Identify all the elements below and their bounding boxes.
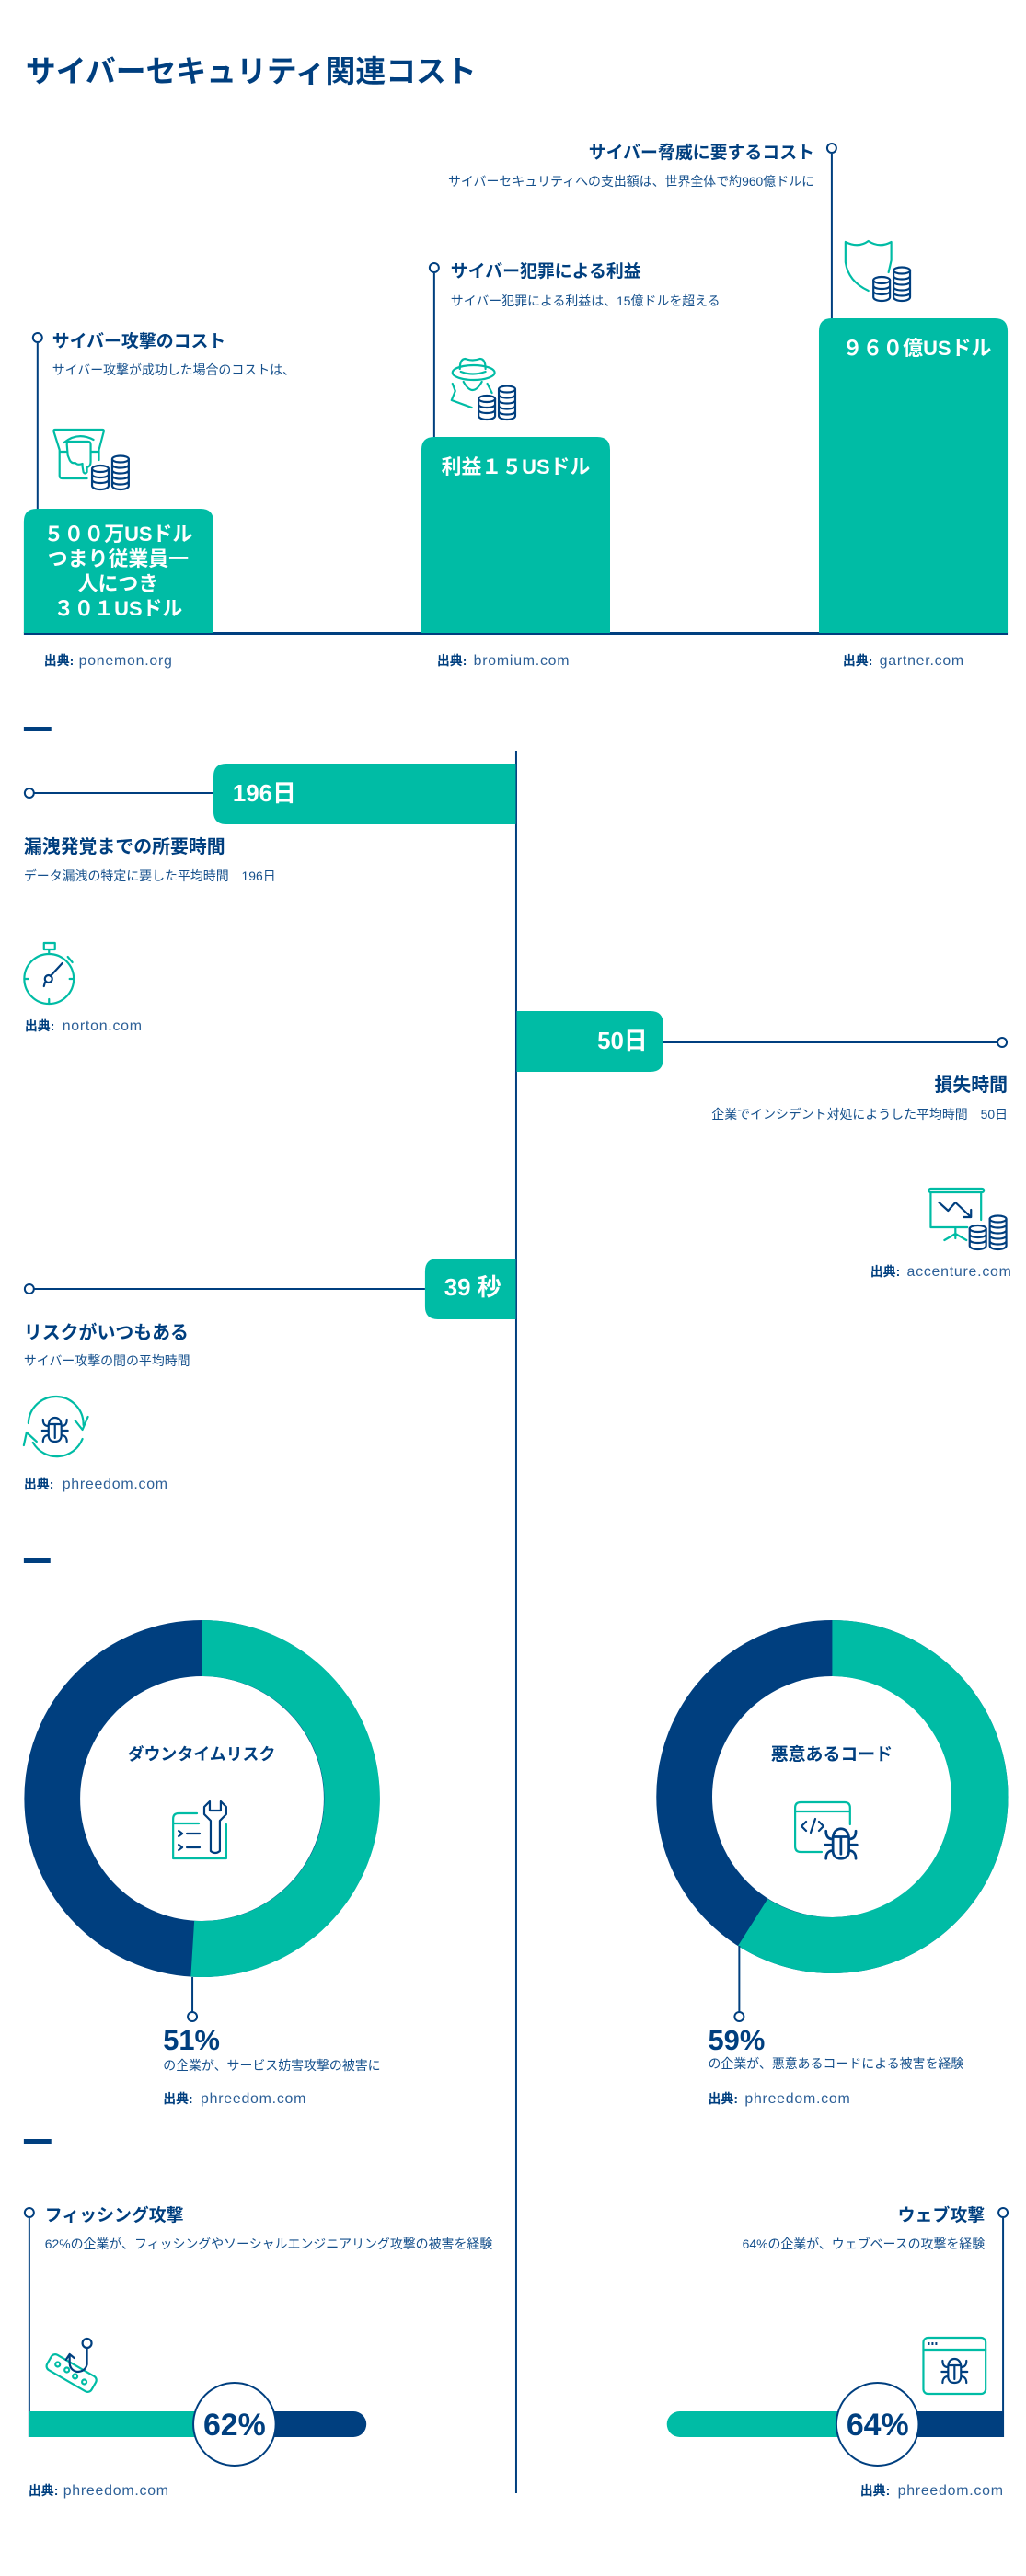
panel: malicious code donut: 悪意あるコード bbox=[771, 1744, 893, 1765]
section marker bbox=[24, 2139, 52, 2144]
progress bar: 62%: 62% bbox=[203, 2408, 266, 2443]
panel: loss time: 損失時間 bbox=[934, 1075, 1008, 1096]
source: phreedom: phreedom.com bbox=[63, 2483, 169, 2499]
bar: threat spending: ９６０億USドル bbox=[843, 337, 991, 360]
callout: attack cost bbox=[33, 331, 295, 509]
donut chart: 51% bbox=[52, 1620, 380, 1977]
source: phreedom: phreedom.com bbox=[898, 2483, 1004, 2499]
value bar: 196 days: 196日 bbox=[233, 781, 296, 807]
panel: malicious code donut bbox=[685, 1620, 1009, 2107]
panel: phishing attack bbox=[25, 2204, 492, 2499]
source: norton: 出典: bbox=[25, 1018, 54, 1033]
panel: phishing attack: フィッシング攻撃 bbox=[45, 2204, 184, 2225]
callout: threat spending: サイバーセキュリティへの支出額は、世界全体で約960億ドルに bbox=[448, 174, 814, 189]
section marker bbox=[24, 727, 52, 731]
source: phreedom: 出典: bbox=[163, 2091, 193, 2106]
source: gartner: gartner.com bbox=[880, 653, 964, 669]
title: サイバーセキュリティ関連コスト bbox=[26, 54, 477, 88]
bar: attack cost bbox=[24, 509, 213, 633]
donut chart: 59% bbox=[685, 1620, 1009, 1973]
icon: code window with bug bbox=[795, 1802, 857, 1858]
source: ponemon: ponemon.org bbox=[79, 653, 173, 669]
source: bromium: bromium.com bbox=[474, 653, 570, 669]
value bar: 39 seconds: 39 秒 bbox=[444, 1274, 501, 1301]
progress bar: 64%: 64% bbox=[847, 2408, 909, 2443]
baseline bbox=[24, 632, 1008, 635]
panel: time to detect: 漏洩発覚までの所要時間 bbox=[24, 836, 225, 857]
progress bar: 62% bbox=[29, 2383, 366, 2466]
value bar: 50 days bbox=[516, 1011, 663, 1072]
icon: browser with bug bbox=[923, 2338, 986, 2394]
bar: threat spending bbox=[819, 318, 1008, 633]
progress bar: 64% bbox=[667, 2383, 1003, 2466]
value bar: 196 days bbox=[213, 764, 515, 824]
source: norton: norton.com bbox=[63, 1018, 143, 1034]
source: ponemon: 出典: bbox=[44, 653, 74, 668]
source: phreedom: phreedom.com bbox=[63, 1477, 168, 1492]
source: accenture: 出典: bbox=[870, 1264, 900, 1279]
panel: risk always: リスクがいつもある bbox=[24, 1321, 189, 1343]
source: phreedom: phreedom.com bbox=[744, 2091, 850, 2107]
bar: attack cost: ３０１USドル bbox=[53, 597, 182, 620]
panel: loss time: 企業でインシデント対処にようした平均時間 50日 bbox=[711, 1107, 1008, 1121]
icon: bug cycle bbox=[24, 1397, 88, 1456]
bar: attack cost: つまり従業員一 bbox=[48, 547, 189, 570]
icon: phishing hook bbox=[45, 2339, 98, 2394]
panel: downtime risk donut: の企業が、サービス妨害攻撃の被害に bbox=[163, 2058, 381, 2073]
icon: hacker with hat bbox=[452, 359, 515, 420]
panel: time to detect: データ漏洩の特定に要した平均時間 196日 bbox=[24, 868, 276, 883]
icon: shield bbox=[846, 241, 910, 301]
bar: crime profit: 利益１５USドル bbox=[442, 455, 590, 478]
callout: crime profit bbox=[430, 261, 721, 437]
source: phreedom: 出典: bbox=[709, 2091, 738, 2106]
source: phreedom: 出典: bbox=[24, 1477, 53, 1491]
bar: attack cost: ５００万USドル bbox=[44, 523, 192, 546]
section marker bbox=[24, 1558, 51, 1563]
icon: presentation chart bbox=[928, 1189, 1007, 1249]
icon: stopwatch bbox=[24, 943, 74, 1004]
panel: risk always: サイバー攻撃の間の平均時間 bbox=[24, 1353, 190, 1368]
source: accenture: accenture.com bbox=[907, 1264, 1012, 1280]
icon: hand on card bbox=[53, 430, 129, 489]
center axis bbox=[515, 751, 517, 2493]
panel: phishing attack: 62%の企業が、フィッシングやソーシャルエンジニアリング攻撃の被害を経験 bbox=[45, 2237, 492, 2251]
callout: threat spending bbox=[448, 142, 836, 318]
panel: time to detect bbox=[24, 764, 515, 1034]
source: bromium: 出典: bbox=[437, 653, 467, 668]
panel: web attack bbox=[667, 2204, 1008, 2499]
panel: loss time bbox=[516, 1011, 1012, 1280]
panel: malicious code donut: の企業が、悪意あるコードによる被害を経験 bbox=[709, 2056, 963, 2071]
callout: attack cost: サイバー攻撃が成功した場合のコストは、 bbox=[52, 362, 295, 377]
source: phreedom: 出典: bbox=[29, 2483, 58, 2498]
source: phreedom: 出典: bbox=[860, 2483, 890, 2498]
callout: threat spending: サイバー脅威に要するコスト bbox=[589, 142, 814, 163]
bar: crime profit bbox=[421, 437, 610, 633]
panel: web attack: 64%の企業が、ウェブベースの攻撃を経験 bbox=[743, 2237, 985, 2251]
panel: downtime risk donut bbox=[52, 1620, 381, 2107]
panel: cost bars bbox=[24, 142, 1008, 669]
callout: crime profit: サイバー犯罪による利益 bbox=[451, 261, 641, 282]
bar: attack cost: 人につき bbox=[78, 572, 158, 595]
panel: downtime risk donut: 51% bbox=[163, 2024, 220, 2056]
panel: downtime risk donut: ダウンタイムリスク bbox=[128, 1744, 275, 1764]
icon: wrench and code panel bbox=[173, 1801, 226, 1858]
callout: crime profit: サイバー犯罪による利益は、15億ドルを超える bbox=[451, 293, 721, 308]
panel: web attack: ウェブ攻撃 bbox=[898, 2204, 985, 2225]
value bar: 39 seconds bbox=[425, 1259, 515, 1319]
source: gartner: 出典: bbox=[843, 653, 872, 668]
value bar: 50 days: 50日 bbox=[597, 1029, 648, 1054]
panel: malicious code donut: 59% bbox=[709, 2024, 765, 2056]
source: phreedom: phreedom.com bbox=[201, 2091, 306, 2107]
panel: risk always bbox=[24, 1259, 515, 1492]
callout: attack cost: サイバー攻撃のコスト bbox=[52, 331, 225, 351]
